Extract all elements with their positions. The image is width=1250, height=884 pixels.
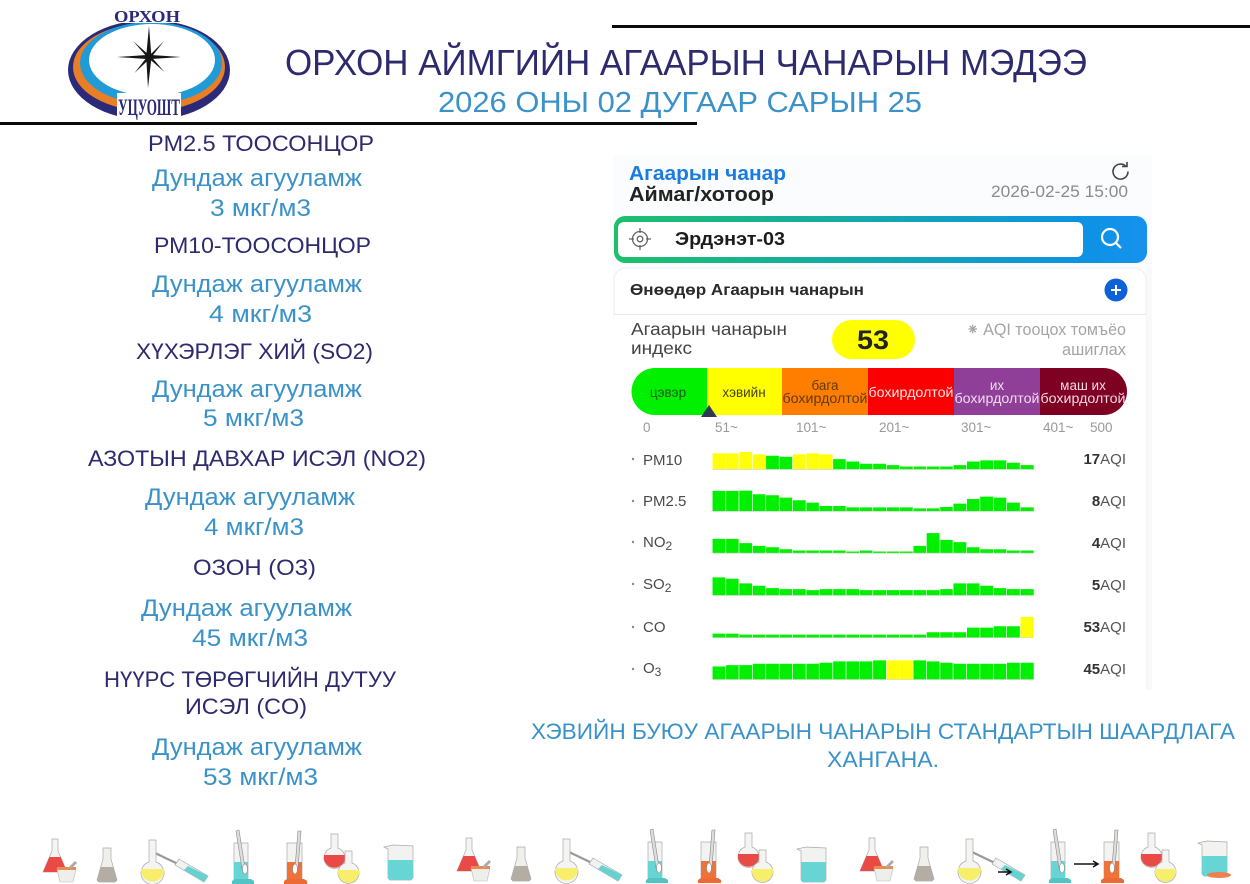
value: PM2.5: 8AQI [1092, 493, 1126, 510]
CO heading: ИСЭЛ (CO) [185, 694, 307, 719]
AQI formula note: ⁕ AQI тооцох томъёо [966, 321, 1126, 339]
row: PM2.5: PM2.5 [643, 493, 686, 510]
PM2.5 average: 3 мкг/м3 [210, 195, 311, 222]
value: NO2: 4AQI [1092, 535, 1126, 552]
date subtitle: 2026 ОНЫ 02 ДУГААР САРЫН 25 [438, 87, 922, 119]
title: ОРХОН АЙМГИЙН АГААРЫН ЧАНАРЫН МЭДЭЭ [285, 41, 1087, 83]
lab icons row 2 [457, 829, 826, 883]
AQI scale bar: их [990, 378, 1004, 393]
AQI scale bar: маш их [1060, 378, 1106, 393]
scale pointer [701, 405, 717, 417]
card heading: Өнөөдөр Агаарын чанарын [630, 282, 864, 299]
index label [631, 319, 787, 358]
scale ticks: 500 [1090, 420, 1113, 435]
PM2.5 average: Дундаж агууламж [152, 165, 362, 192]
lab icons row 1 [43, 830, 413, 884]
lab icons row 3 [860, 829, 1227, 883]
value: CO: 53AQI [1083, 619, 1126, 636]
AQI scale bar [632, 368, 1127, 415]
CO average: 53 мкг/м3 [203, 764, 318, 791]
row: SO2: 2 [665, 581, 672, 595]
row: PM10: PM10 [643, 452, 682, 469]
SO2 average: 5 мкг/м3 [203, 405, 304, 432]
PM10 heading: РМ10-ТООСОНЦОР [154, 233, 371, 258]
conclusion text: ХЭВИЙН БУЮУ АГААРЫН ЧАНАРЫН СТАНДАРТЫН ШААРДЛАГА [531, 719, 1235, 744]
panel: air quality app screenshot [613, 155, 1152, 690]
row: PM10 [632, 451, 1126, 470]
PM10 average: Дундаж агууламж [152, 271, 362, 298]
pollutant list [88, 131, 426, 791]
O3 average [141, 595, 352, 652]
row: PM2.5 [632, 491, 1126, 512]
PM2.5 average [152, 165, 362, 222]
CO average [152, 734, 362, 791]
AQI scale bar: бохирдолтой [782, 391, 868, 406]
NO2 heading: АЗОТЫН ДАВХАР ИСЭЛ (NO2) [88, 446, 426, 471]
index label: индекс [631, 338, 692, 358]
row: CO [632, 617, 1126, 638]
row: O3 [632, 660, 1126, 680]
icon: refresh [1113, 162, 1128, 179]
NO2 average: Дундаж агууламж [145, 484, 355, 511]
arrow: between cylinders [1074, 861, 1098, 867]
AQI scale bar: бохирдолтой [868, 385, 954, 400]
bars: PM10 [713, 452, 1034, 470]
scale ticks: 301~ [961, 420, 992, 435]
AQI scale bar: бага [811, 378, 839, 393]
conclusion text: ХАНГАНА. [827, 747, 939, 772]
icon: location target [629, 228, 651, 250]
row: O3: 3 [655, 665, 662, 679]
conclusion text [531, 719, 1235, 772]
card: today air quality [614, 268, 1146, 690]
CO average: Дундаж агууламж [152, 734, 362, 761]
AQI value badge: 53 [857, 325, 889, 355]
PM10 average [152, 271, 362, 328]
NO2 average: 4 мкг/м3 [204, 514, 304, 541]
logo bottom word: УЦУОШТ [118, 95, 180, 120]
bars: O3 [713, 660, 1034, 680]
row: NO2: 2 [666, 539, 672, 553]
search bar [614, 216, 1147, 263]
O3 average: 45 мкг/м3 [192, 625, 308, 652]
scale ticks: 401~ [1043, 420, 1074, 435]
orange spill [1207, 872, 1231, 878]
app heading [629, 163, 786, 206]
icon: search [1102, 229, 1121, 248]
timestamp: 2026-02-25 15:00 [991, 183, 1128, 201]
CO heading [104, 667, 397, 719]
header rule [0, 122, 697, 125]
AQI scale bar: бохирдолтой [954, 391, 1040, 406]
station name: Эрдэнэт-03 [675, 229, 785, 249]
bars: NO2 [713, 533, 1034, 554]
PM10 average: 4 мкг/м3 [209, 301, 312, 328]
icon: compass star [117, 26, 181, 88]
logo top word: ОРХОН [114, 7, 180, 26]
scale ticks [643, 420, 1113, 435]
scale ticks: 0 [643, 420, 651, 435]
app heading: Агаарын чанар [629, 163, 786, 185]
value: PM10: 17AQI [1083, 451, 1126, 468]
row: SO2: SO [643, 576, 665, 593]
AQI scale bar: цэвэр [650, 385, 686, 400]
O3 heading: ОЗОН (О3) [193, 555, 316, 580]
AQI formula note: ашиглах [1062, 341, 1127, 359]
arrow: into test tube [998, 869, 1011, 875]
CO heading: НҮҮРС ТӨРӨГЧИЙН ДУТУУ [104, 667, 397, 692]
AQI value badge [832, 320, 915, 359]
index label: Агаарын чанарын [631, 319, 787, 339]
SO2 average [152, 376, 362, 432]
scale ticks: 51~ [715, 420, 738, 435]
scale ticks: 101~ [796, 420, 827, 435]
AQI scale bar: бохирдолтой [1040, 391, 1126, 406]
AQI formula note [966, 321, 1127, 359]
row: CO: CO [643, 619, 666, 636]
logo [68, 6, 230, 121]
PM2.5 heading: PM2.5 ТООСОНЦОР [148, 131, 374, 156]
row: SO2 [632, 576, 1126, 596]
bars: CO [713, 617, 1034, 638]
value: O3: 45AQI [1083, 661, 1126, 678]
bars: SO2 [713, 577, 1034, 596]
scale ticks: 201~ [879, 420, 910, 435]
row: NO2 [632, 533, 1126, 554]
row: NO2: NO [643, 534, 666, 551]
row: O3: O [643, 660, 655, 677]
icon: plus [1104, 278, 1128, 302]
top rule [612, 25, 1250, 28]
value: SO2: 5AQI [1092, 577, 1126, 594]
O3 average: Дундаж агууламж [141, 595, 352, 622]
SO2 heading: ХҮХЭРЛЭГ ХИЙ (SO2) [136, 339, 373, 364]
bars: PM2.5 [713, 491, 1034, 512]
NO2 average [145, 484, 355, 541]
app heading: Аймаг/хотоор [629, 184, 774, 206]
SO2 average: Дундаж агууламж [152, 376, 362, 403]
AQI scale bar: хэвийн [722, 385, 766, 400]
